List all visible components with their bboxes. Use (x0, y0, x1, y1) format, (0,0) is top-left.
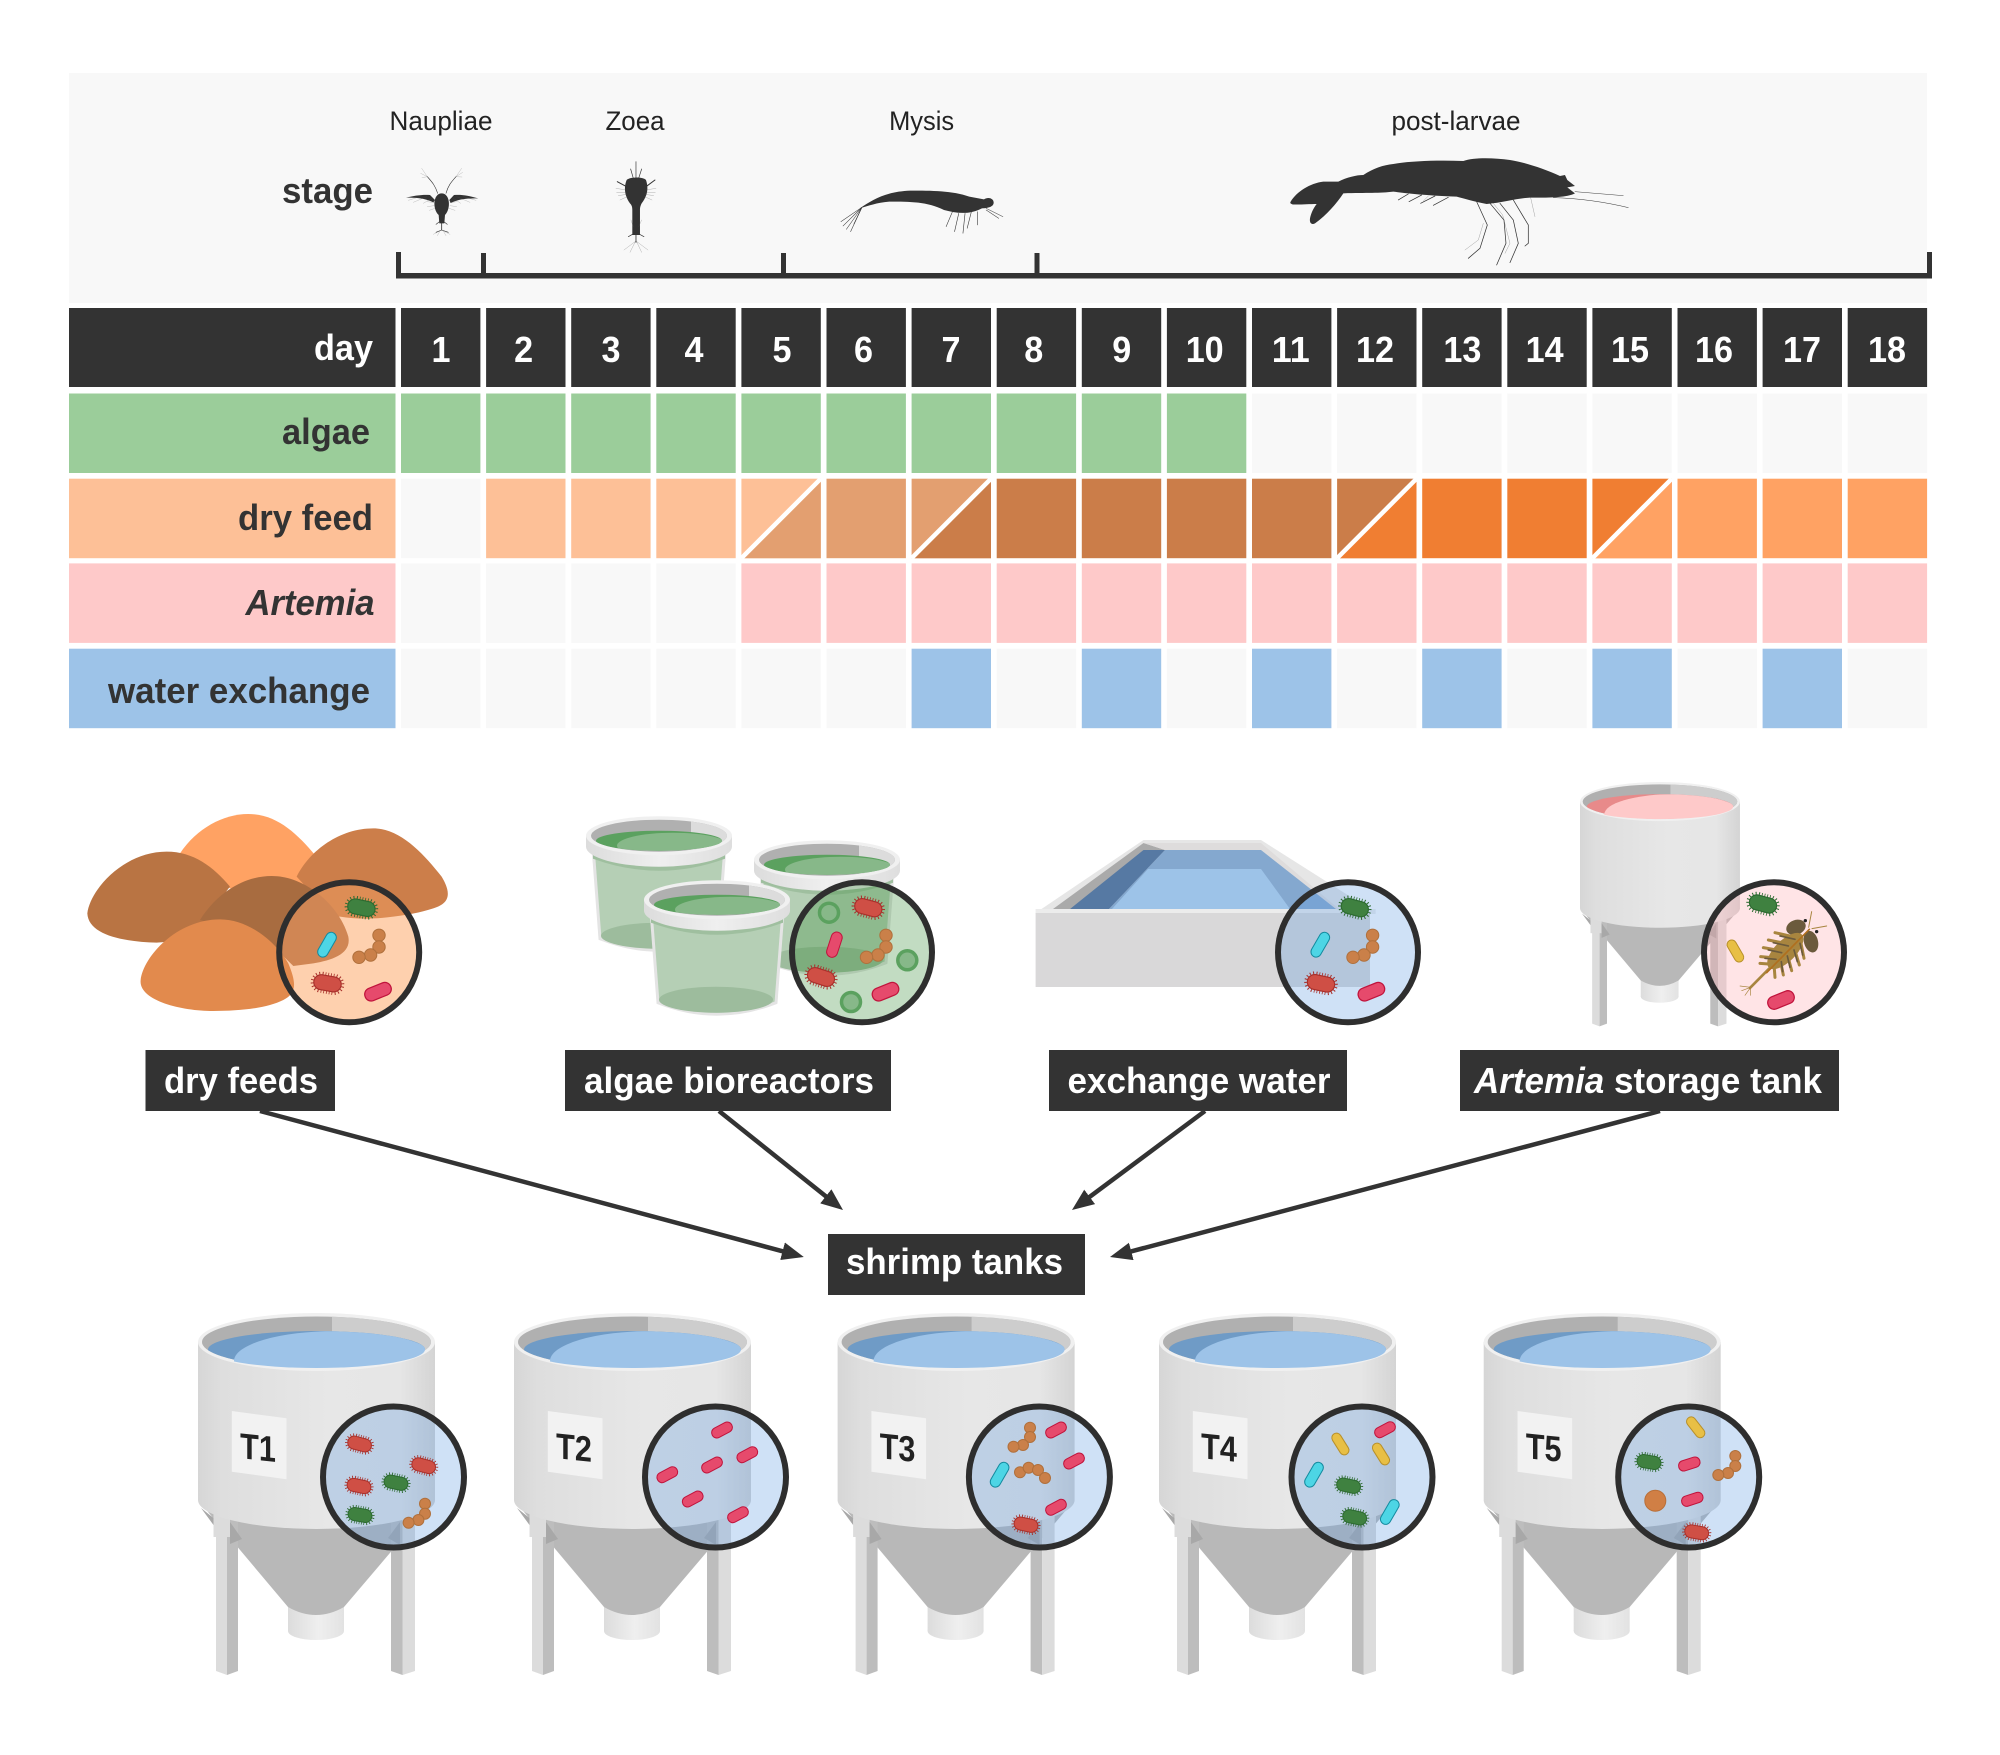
lens: T3 microbes (969, 1406, 1110, 1548)
panel: stage timeline (69, 73, 1932, 303)
icon: dry feed heaps (87, 814, 448, 1011)
icon: nauplius silhouette (406, 168, 478, 236)
tank T5: T5 (1526, 1427, 1562, 1470)
tank T2 (514, 1313, 786, 1675)
label: shrimp tanks (828, 1234, 1085, 1295)
label: Mysis: Mysis (889, 106, 954, 136)
day numbers: 4 (684, 329, 704, 370)
day numbers: 9 (1112, 329, 1131, 370)
lens: algae microbes (792, 882, 932, 1022)
lens: T5 microbes (1618, 1406, 1759, 1548)
label: day: day (314, 327, 373, 368)
row: algae (69, 394, 1927, 473)
tank T3: T3 (880, 1427, 915, 1470)
day numbers: 12 (1356, 329, 1394, 370)
day numbers: 1 (432, 329, 450, 370)
arrow: algae bioreactors to shrimp tanks (719, 1111, 838, 1206)
label: dry feed: dry feed (238, 497, 373, 538)
day numbers: 10 (1186, 329, 1224, 370)
tank T4 (1159, 1313, 1432, 1675)
label: dry feeds (146, 1050, 335, 1111)
row: Artemia (69, 563, 1927, 643)
icon: exchange water basin (1036, 840, 1376, 987)
label: exchange water (1049, 1050, 1347, 1111)
lens: T1 microbes (323, 1406, 464, 1548)
day numbers: 5 (772, 329, 792, 370)
day numbers: 2 (514, 329, 533, 370)
icon: Artemia (1740, 912, 1827, 995)
label: algae: algae (282, 411, 370, 452)
lens: T4 microbes (1292, 1406, 1432, 1548)
day numbers (432, 329, 1906, 370)
day numbers: 6 (854, 329, 873, 370)
icon: algae bioreactors (586, 816, 900, 1014)
day numbers: 17 (1783, 329, 1821, 370)
label: algae bioreactors: algae bioreactors (584, 1060, 874, 1101)
label: algae bioreactors (565, 1050, 891, 1111)
tank T1 (198, 1313, 464, 1675)
arrow: dry feeds to shrimp tanks (260, 1111, 798, 1255)
tank T5 (1484, 1313, 1759, 1675)
day numbers: 18 (1868, 329, 1906, 370)
icon: post-larva silhouette (1290, 158, 1628, 265)
arrow: exchange water to shrimp tanks (1077, 1111, 1205, 1206)
timeline bracket (396, 252, 1932, 278)
lens: T2 microbes (645, 1406, 786, 1548)
label: water exchange: water exchange (107, 670, 370, 711)
label: dry feeds: dry feeds (164, 1060, 318, 1101)
label: Naupliae: Naupliae (390, 106, 492, 136)
tank T1: T1 (240, 1427, 276, 1470)
icon: mysis silhouette (841, 191, 1003, 233)
day numbers: 8 (1024, 329, 1043, 370)
tank T2: T2 (556, 1427, 592, 1470)
day numbers: 16 (1695, 329, 1733, 370)
label: Zoea: Zoea (606, 106, 665, 136)
lens: dry feed microbes (276, 879, 422, 1026)
lens: Artemia microbes (1704, 882, 1844, 1022)
label: Artemia storage tank: Artemia storage tank (1473, 1060, 1823, 1101)
label: post-larvae: post-larvae (1392, 106, 1520, 136)
lens: exchange water microbes (1278, 882, 1418, 1022)
row: dry feed (69, 479, 1927, 558)
icon: zoea silhouette (616, 162, 656, 252)
row: water exchange (69, 649, 1927, 728)
label: Artemia storage tank (1460, 1050, 1839, 1111)
label: shrimp tanks: shrimp tanks (846, 1241, 1063, 1282)
tank T3 (838, 1313, 1110, 1675)
day numbers: 15 (1611, 329, 1649, 370)
day numbers: 11 (1272, 329, 1310, 370)
day numbers: 3 (602, 329, 620, 370)
day numbers: 13 (1443, 329, 1481, 370)
icon: Artemia storage tank (1580, 782, 1745, 1026)
row: day header (69, 308, 1927, 387)
day numbers: 14 (1526, 329, 1564, 370)
heading: stage: stage (282, 170, 373, 211)
arrow: Artemia tank to shrimp tanks (1116, 1111, 1660, 1256)
label: Artemia: Artemia (245, 582, 374, 623)
day numbers: 7 (942, 329, 960, 370)
label: exchange water: exchange water (1068, 1060, 1330, 1101)
tank T4: T4 (1201, 1427, 1237, 1471)
